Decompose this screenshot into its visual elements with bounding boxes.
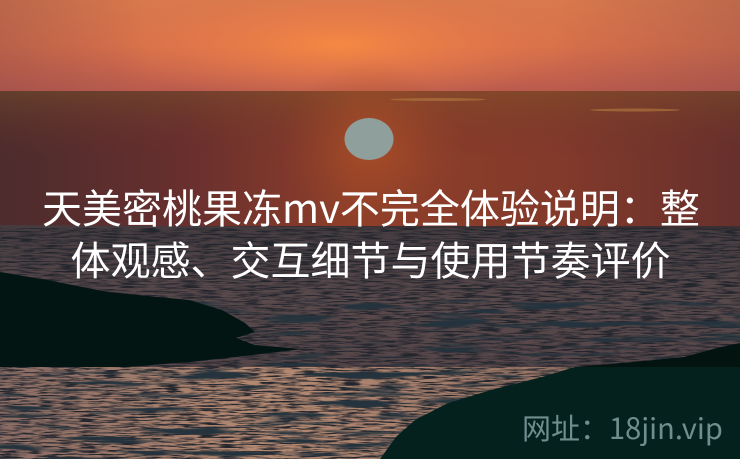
light streak on water	[390, 98, 486, 101]
darkened upper sea band	[0, 60, 740, 230]
watermark: 网址：18jin.vip	[522, 406, 723, 448]
sky	[0, 0, 740, 105]
sun	[344, 118, 394, 160]
title line 2: 体观感、交互细节与使用节奏评价	[70, 229, 670, 287]
right headland silhouette	[380, 343, 740, 459]
title	[42, 177, 700, 287]
left island silhouette	[0, 272, 302, 367]
sea surface	[0, 225, 740, 459]
title line 1: 天美密桃果冻mv不完全体验说明：整	[42, 177, 700, 235]
light streak on water	[590, 108, 680, 112]
